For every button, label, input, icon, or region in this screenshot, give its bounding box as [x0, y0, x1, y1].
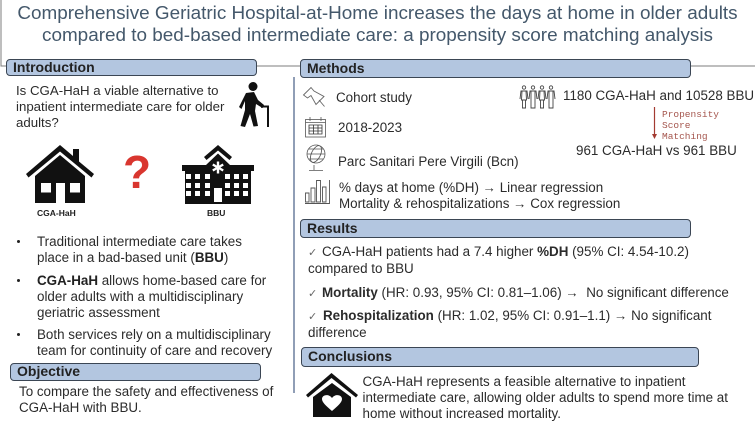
heading: conclusions: [301, 347, 699, 366]
icon: hospital BBU: [182, 145, 254, 204]
result: rehospitalization: [308, 308, 712, 340]
heading: methods: Methods: [307, 60, 365, 76]
text: cohort study: Cohort study: [336, 90, 412, 104]
text: propensity score matching: Propensity: [662, 108, 719, 120]
bullet: both services: [37, 326, 272, 358]
text: propensity score matching: Matching: [662, 131, 708, 142]
text: conclusions: [362, 374, 728, 421]
bullet: CGA-HaH: CGA-HaH allows home-based care for: [37, 272, 266, 288]
text: research question: Is CGA-HaH a viable alternative to: [16, 82, 219, 98]
bullet dot 3: [17, 332, 20, 336]
result: days at home: [308, 244, 689, 276]
text: years: 2018-2023: [338, 120, 402, 135]
result: mortality: Mortality (HR: 0.93, 95% CI: 0.81–1.06) → No significant difference: [322, 284, 729, 300]
bullet dot 2: [17, 278, 20, 282]
text: objective: To compare the safety and effectiveness of: [19, 384, 273, 398]
text: conclusions: home without increased mortality.: [362, 406, 561, 421]
text: analysis: % days at home (%DH) → Linear regression: [339, 180, 603, 195]
bullet list: [17, 234, 272, 358]
bullet: both services: team for continuity of care and recovery: [37, 343, 272, 358]
heading: results: [300, 219, 691, 238]
title: Comprehensive Geriatric Hospital-at-Home increases the days at home in older adults: [17, 2, 738, 24]
heading: methods: [300, 59, 691, 78]
text: propensity score matching: [662, 108, 719, 142]
title: compared to bed-based intermediate care: a propensity score matching analysis: [42, 24, 713, 46]
bullet: CGA-HaH: [37, 272, 266, 320]
bullet: both services: Both services rely on a multidisciplinary: [37, 326, 271, 342]
bullet: traditional care: Traditional intermediate care takes: [37, 234, 242, 249]
heading: results: Results: [307, 220, 358, 236]
heading: introduction: Introduction: [13, 59, 95, 75]
label: CGA-HaH: CGA-HaH: [37, 208, 76, 218]
icon: pushpin: [302, 87, 325, 107]
icon: house with heart: [306, 373, 358, 417]
heading: objective: Objective: [17, 363, 80, 379]
text: cohort sizes: 1180 CGA-HaH and 10528 BBU: [563, 88, 754, 102]
result: days at home: ✓: [308, 247, 317, 259]
bullet: traditional care: [37, 234, 242, 265]
icon: group of people: [520, 85, 556, 108]
result: days at home: CGA-HaH patients had a 7.4 higher %DH (95% CI: 4.54-10.2): [322, 244, 689, 259]
text: site: Parc Sanitari Pere Virgili (Bcn): [338, 154, 519, 168]
text: objective: CGA-HaH with BBU.: [19, 400, 142, 415]
label: BBU: BBU: [207, 208, 225, 218]
text: objective: [19, 384, 274, 415]
icon: house CGA-HaH: [26, 145, 94, 203]
heading: conclusions: Conclusions: [308, 348, 392, 364]
text: conclusions: intermediate care, allowing older adults to spend more time at: [362, 390, 728, 405]
text: propensity score matching: Score: [662, 120, 691, 131]
icon: globe: [306, 144, 326, 171]
result: rehospitalization: difference: [308, 325, 367, 340]
text: conclusions: CGA-HaH represents a feasible alternative to inpatient: [362, 374, 686, 388]
title: [17, 2, 738, 46]
text: analysis: [339, 180, 620, 211]
arrow: matching: [652, 107, 657, 139]
bullet: CGA-HaH: older adults with a multidisciplinary: [37, 289, 243, 304]
icon: older person with cane: [239, 82, 269, 127]
text: matched cohort: 961 CGA-HaH vs 961 BBU: [576, 143, 737, 158]
icon: red question mark: ?: [123, 146, 151, 198]
text: research question: [16, 82, 224, 130]
icon: bar chart: [305, 180, 330, 204]
result: mortality: ✓: [308, 288, 317, 300]
result: days at home: compared to BBU: [308, 261, 414, 276]
bullet: traditional care: place in a bad-based unit (BBU): [37, 250, 228, 265]
bullet dot 1: [17, 240, 20, 243]
heading: introduction: [6, 59, 257, 76]
text: research question: adults?: [16, 115, 59, 130]
text: research question: inpatient intermediate care for older: [16, 99, 224, 114]
result: rehospitalization: ✓: [308, 311, 317, 323]
bullet: CGA-HaH: geriatric assessment: [37, 305, 160, 320]
icon: calendar: [305, 117, 326, 138]
heading: objective: [10, 363, 261, 381]
text: analysis: Mortality & rehospitalizations → Cox regression: [339, 196, 620, 211]
result: rehospitalization: Rehospitalization (HR: 1.02, 95% CI: 0.91–1.1) → No significant: [323, 308, 711, 323]
